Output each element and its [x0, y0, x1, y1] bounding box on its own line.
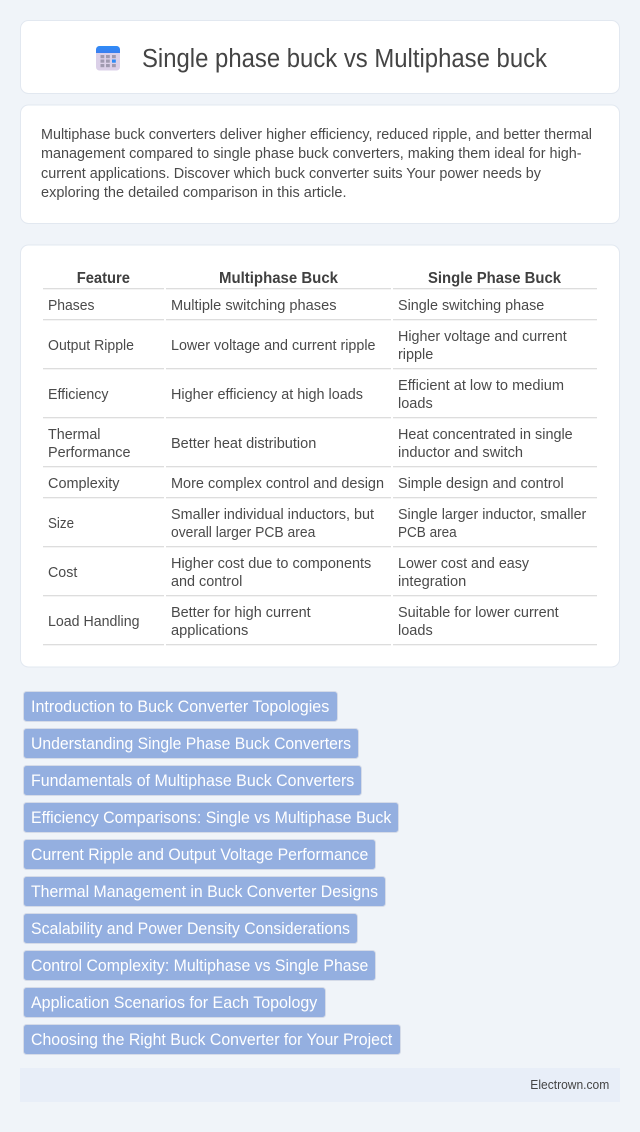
topic chip 3	[24, 766, 362, 796]
footer	[20, 1068, 620, 1102]
row: complexity	[48, 476, 564, 492]
row: cost	[48, 556, 530, 590]
row: complexity: Complexity	[48, 476, 120, 492]
topic chip 2	[24, 728, 358, 758]
row: phases: Phases	[48, 298, 94, 314]
row: cost: Higher cost due to components	[171, 556, 371, 572]
panel: introduction text	[20, 105, 620, 224]
row: size: Single larger inductor, smaller	[398, 507, 586, 523]
topic chip 4: Efficiency Comparisons: Single vs Multiphase Buck	[31, 808, 392, 827]
panel: introduction text: Multiphase buck converters deliver higher efficiency, reduced ripple, and better thermal	[41, 127, 592, 143]
row: efficiency: Efficient at low to medium	[398, 378, 564, 394]
topic chip 3: Fundamentals of Multiphase Buck Converters	[31, 771, 354, 790]
topic chip 1	[24, 692, 338, 722]
panel: comparison table	[20, 245, 620, 667]
row: thermal performance: inductor and switch	[398, 445, 523, 461]
row: cost: Lower cost and easy	[398, 556, 530, 572]
table header row: Single Phase Buck	[428, 270, 561, 287]
topic chip 4	[24, 802, 398, 832]
title: Single phase buck vs Multiphase buck	[142, 45, 547, 73]
topic chip 7: Scalability and Power Density Considerations	[31, 919, 350, 938]
topic chip 8: Control Complexity: Multiphase vs Single Phase	[31, 956, 368, 975]
row: thermal performance: Heat concentrated in single	[398, 427, 573, 443]
row: phases	[48, 298, 544, 314]
row: thermal performance: Thermal	[48, 427, 100, 443]
row: thermal performance: Performance	[48, 445, 130, 461]
row: phases: Single switching phase	[398, 298, 544, 314]
topic chip 10	[24, 1024, 400, 1054]
row: thermal performance	[48, 427, 573, 461]
row: efficiency: Higher efficiency at high loads	[171, 387, 363, 403]
row: load handling: Better for high current	[171, 605, 311, 621]
row: output ripple: Lower voltage and current ripple	[171, 338, 376, 354]
row: phases: Multiple switching phases	[171, 298, 336, 314]
row: size: Smaller individual inductors, but	[171, 507, 374, 523]
topic chip 6: Thermal Management in Buck Converter Designs	[31, 882, 378, 901]
row: efficiency	[48, 378, 564, 412]
panel: introduction text: current applications. Discover which buck converter suits Your power needs by	[41, 166, 542, 182]
row: cost: Cost	[48, 565, 77, 581]
topic chip 9	[24, 988, 326, 1018]
panel: title header	[20, 20, 620, 94]
panel: introduction text: exploring the detailed comparison in this article.	[41, 185, 346, 201]
table header row	[77, 270, 561, 287]
icon: calendar	[96, 46, 120, 70]
topic chip 2: Understanding Single Phase Buck Converters	[31, 734, 351, 753]
row: thermal performance: Better heat distribution	[171, 436, 316, 452]
row: efficiency: Efficiency	[48, 387, 109, 403]
row: output ripple: Output Ripple	[48, 338, 134, 354]
topic chip 7	[24, 914, 358, 944]
table header row: Multiphase Buck	[219, 270, 338, 287]
row: output ripple	[48, 329, 567, 363]
row: output ripple: ripple	[398, 347, 433, 363]
row: load handling: loads	[398, 623, 433, 639]
row: output ripple: Higher voltage and current	[398, 329, 567, 345]
topic chip 1: Introduction to Buck Converter Topologies	[31, 697, 329, 716]
topic chip 6	[24, 876, 386, 906]
list of article topics	[24, 692, 400, 1054]
row: complexity: More complex control and design	[171, 476, 384, 492]
row: size: overall larger PCB area	[171, 525, 316, 541]
row: complexity: Simple design and control	[398, 476, 564, 492]
row: efficiency: loads	[398, 396, 433, 412]
row: cost: and control	[171, 574, 242, 590]
row: load handling: Load Handling	[48, 614, 140, 630]
topic chip 5	[24, 840, 376, 870]
row: size: PCB area	[398, 525, 458, 541]
topic chip 5: Current Ripple and Output Voltage Performance	[31, 845, 368, 864]
row: size	[48, 507, 586, 541]
footer: Electrown.com	[530, 1078, 609, 1092]
row: load handling	[48, 605, 559, 639]
row: size: Size	[48, 516, 74, 532]
topic chip 8	[24, 950, 376, 980]
topic chip 10: Choosing the Right Buck Converter for Your Project	[31, 1030, 393, 1049]
row: cost: integration	[398, 574, 466, 590]
topic chip 9: Application Scenarios for Each Topology	[31, 993, 318, 1012]
row: load handling: Suitable for lower current	[398, 605, 559, 621]
row: load handling: applications	[171, 623, 248, 639]
panel: introduction text: management compared to single phase buck converters, making them ideal for high-	[41, 146, 582, 162]
table header row: Feature	[77, 270, 130, 287]
